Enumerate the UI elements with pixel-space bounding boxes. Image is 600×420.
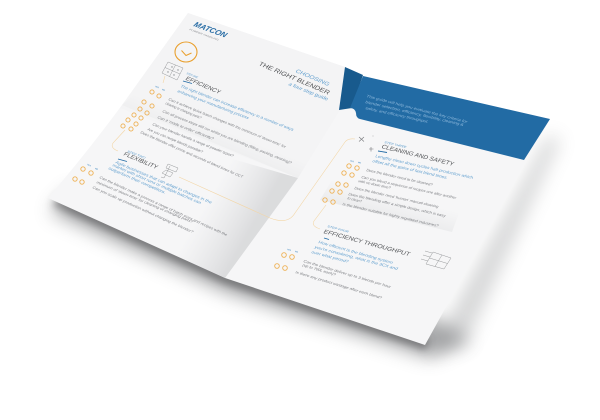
step four questions: Is there any product wastage after each blend? bbox=[294, 270, 383, 300]
panel: step two flexibility bbox=[73, 150, 228, 237]
heading: choosing the right blender bbox=[257, 61, 332, 102]
logo: MATCON bbox=[192, 20, 230, 39]
panel: blue cover band bbox=[339, 67, 550, 160]
step four intro: over what period? bbox=[310, 249, 351, 264]
step one questions: cleaning or changing parts? bbox=[164, 102, 202, 120]
step three intro: Lengthy clean down cycles halt production which bbox=[375, 153, 474, 180]
step two intro: outperform their competitors. bbox=[107, 166, 167, 195]
icon: sparkle marks bbox=[359, 136, 374, 152]
step two questions: minimum of 'down-time' for cleaning or changing parts? bbox=[95, 181, 194, 224]
step four intro bbox=[310, 240, 399, 271]
icon: throughput grid bbox=[421, 251, 451, 269]
logo: POWDER HANDLING bbox=[188, 28, 220, 42]
step two heading: FLEXIBILITY bbox=[122, 152, 159, 171]
step two yes/no checkboxes: NO bbox=[95, 168, 98, 171]
cover intro text bbox=[365, 94, 469, 127]
step three questions: Does the blender need 'human' manual cleaning bbox=[354, 186, 439, 209]
step four questions: (up to 700L each)? bbox=[301, 263, 337, 277]
icon: grid blender bbox=[162, 62, 183, 83]
step three questions bbox=[342, 168, 458, 228]
step four heading: STEP FOUR bbox=[326, 224, 350, 234]
step one intro: The right blender can increase efficiency in a number of ways bbox=[179, 84, 295, 132]
icon: orange circle with chevron bbox=[175, 42, 197, 62]
step one questions: Can your blender handle a range of powder types? bbox=[151, 123, 235, 158]
heading: choosing the right blender: CHOOSING bbox=[294, 69, 331, 88]
step two intro: Agile businesses that can adapt to changes in the bbox=[114, 160, 214, 205]
step one heading: EFFICIENCY bbox=[184, 76, 222, 96]
step three questions: Is the blender suitable for highly regulated industries? bbox=[342, 202, 439, 228]
step one questions: Are you can recipe blends possible? bbox=[146, 128, 204, 154]
cover intro text: safety, and efficiency throughput. bbox=[365, 106, 429, 124]
connector line: orange route bbox=[112, 130, 355, 229]
step three yes/no checkboxes bbox=[323, 161, 361, 204]
step one yes/no checkboxes bbox=[121, 86, 166, 131]
step one yes/no checkboxes: NO bbox=[162, 89, 166, 92]
step two heading: STEP TWO bbox=[126, 150, 147, 160]
step three yes/no checkboxes: YES bbox=[350, 161, 355, 163]
step two questions: Can you scale up production without changing the blender? bbox=[91, 186, 194, 234]
step two questions: Can the blender make a process a range of batch sizes and recipes with the bbox=[98, 176, 228, 237]
step one intro: enhancing your manufacturing process bbox=[176, 89, 250, 120]
step one questions: Can it 'made to order' efficiently? bbox=[156, 116, 215, 141]
step four yes/no checkboxes bbox=[275, 249, 299, 270]
step one questions: Can it achieve quick batch changes with the minimum of 'down-time' for bbox=[167, 98, 288, 149]
step three questions: Can you blend a sequence of recipes one after another bbox=[361, 175, 458, 200]
panel: step three cleaning and safety bbox=[323, 136, 474, 228]
step three yes/no checkboxes: NO bbox=[358, 162, 361, 165]
step three heading bbox=[378, 140, 455, 168]
heading: choosing the right blender: a four step guide bbox=[287, 82, 330, 102]
step two intro bbox=[107, 160, 214, 205]
step one yes/no checkboxes: YES bbox=[155, 86, 160, 89]
step three questions: Does the blender need to be cleaned? bbox=[366, 168, 433, 187]
brochure paper bbox=[48, 13, 550, 345]
step four intro: How efficient is the blending system bbox=[317, 240, 395, 265]
step three questions: Does the blending offer a simple design, which is easy bbox=[348, 192, 447, 218]
drop shadow under brochure bbox=[50, 135, 560, 358]
step one heading bbox=[183, 72, 222, 96]
step two intro: market with short runs or multiple batches can bbox=[111, 163, 203, 205]
step three intro: offset all the gains of fast blend times. bbox=[372, 158, 449, 180]
step three questions: with no down time? bbox=[358, 179, 391, 190]
step one questions bbox=[139, 98, 293, 179]
icon: signpost bbox=[161, 164, 178, 178]
panel: step one efficiency bbox=[121, 62, 295, 179]
step four intro: you're considering, what is the 3CX and bbox=[313, 244, 399, 271]
step four yes/no checkboxes: NO bbox=[295, 251, 299, 254]
step four yes/no checkboxes: YES bbox=[287, 249, 292, 252]
cover intro text: This guide will help you evaluate the key criteria for bbox=[365, 94, 469, 124]
step three heading: CLEANING AND SAFETY bbox=[380, 144, 455, 168]
step two yes/no checkboxes bbox=[73, 164, 98, 184]
step four questions: Can the blender deliver up to 3 blends per hour bbox=[302, 259, 393, 289]
step four heading: EFFICIENCY THROUGHPUT bbox=[322, 229, 411, 258]
step one questions: Does the blender offer prime and seconds of blend times for OCT bbox=[139, 131, 245, 179]
step two yes/no checkboxes: YES bbox=[87, 164, 92, 168]
step one questions: Can all process steps still run whilst you are blending (filling, packing, cleaning)? bbox=[161, 110, 293, 165]
step four heading bbox=[322, 224, 411, 258]
panel: step four efficiency throughput bbox=[275, 224, 451, 300]
cover intro text: blender selection, efficiency, flexibility, cleaning & bbox=[365, 100, 465, 127]
step four questions bbox=[294, 259, 393, 300]
step one heading: STEP ONE bbox=[185, 72, 199, 79]
heading: choosing the right blender: THE RIGHT BLENDER bbox=[257, 61, 332, 97]
step three heading: STEP THREE bbox=[384, 140, 408, 149]
step three questions: to clean? bbox=[347, 196, 363, 203]
